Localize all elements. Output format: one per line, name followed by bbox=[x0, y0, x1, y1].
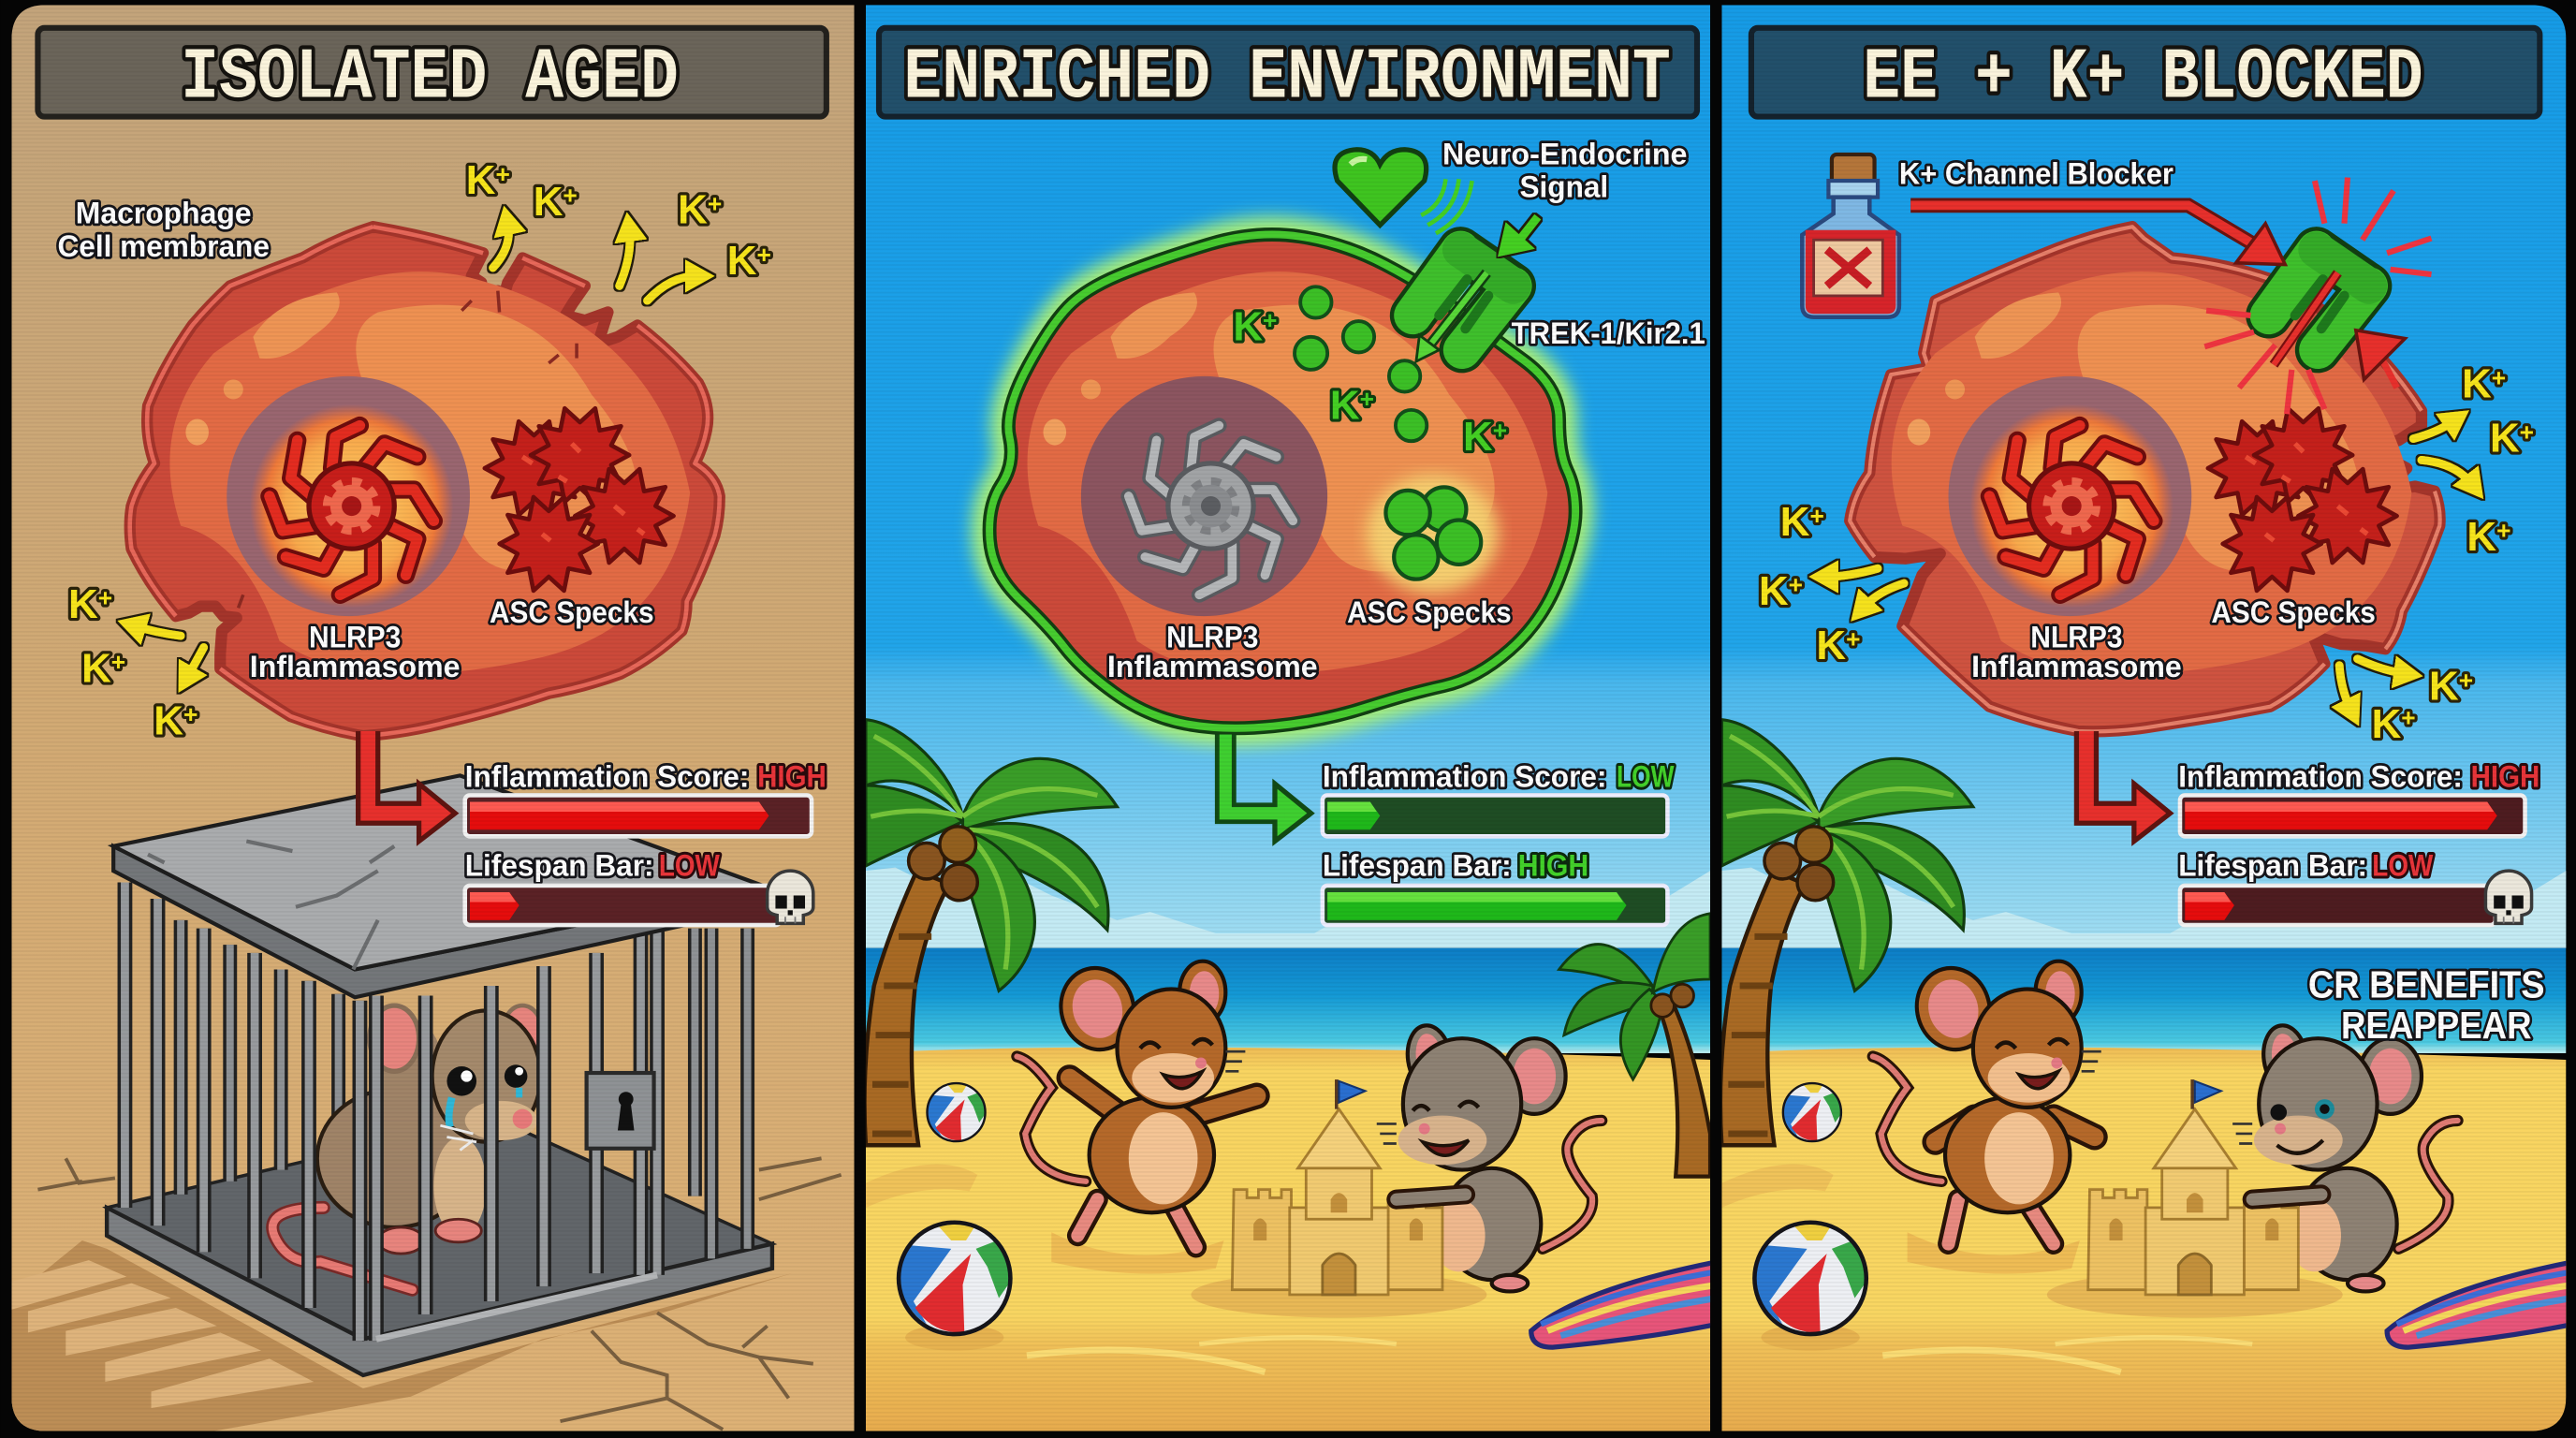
macrophage cell: healthy with green membrane bbox=[989, 234, 1575, 728]
macrophage cell: damaged again bbox=[1850, 227, 2440, 731]
inflammation score bar: high: Inflammation Score: bbox=[2178, 760, 2463, 794]
title bar: isolated aged: ISOLATED AGED bbox=[181, 38, 679, 120]
neuro-endocrine heart and signal bbox=[1335, 150, 1538, 252]
labels: enriched panel: Inflammasome bbox=[1107, 650, 1318, 683]
potassium entering through channel bbox=[1233, 286, 1507, 460]
label: macrophage cell membrane: Macrophage bbox=[76, 197, 252, 230]
potassium entering through channel: + bbox=[1263, 306, 1277, 334]
K+ ions leaving cell: + bbox=[708, 189, 722, 217]
macrophage cell: ruptured bbox=[130, 227, 720, 736]
labels: blocked panel bbox=[1971, 595, 2376, 683]
K+ ions leaving cell: + bbox=[2520, 418, 2534, 446]
labels: enriched panel: NLRP3 bbox=[1166, 620, 1258, 653]
lifespan bar: high: Lifespan Bar: bbox=[1323, 848, 1512, 882]
callout: CR benefits reappear: REAPPEAR bbox=[2341, 1004, 2532, 1047]
panel: enriched environment bbox=[865, 5, 1717, 1431]
K+ ions leaving cell: K bbox=[154, 697, 183, 743]
K+ ions leaving cell bbox=[68, 157, 771, 743]
potassium entering through channel: + bbox=[1493, 417, 1507, 445]
K+ ions leaving cell: K bbox=[2372, 701, 2401, 747]
potassium entering through channel: K bbox=[1330, 383, 1360, 429]
potassium entering through channel: K bbox=[1463, 414, 1493, 460]
sandcastle bbox=[2047, 1079, 2343, 1318]
potassium entering through channel: + bbox=[1360, 385, 1374, 413]
K+ ions leaving cell: K bbox=[534, 179, 563, 225]
title bar: EE + K+ blocked: EE + K+ BLOCKED bbox=[1863, 38, 2423, 120]
K+ ions leaving cell: K bbox=[1759, 568, 1789, 614]
TREK-1/Kir2.1 channel bbox=[1412, 250, 1513, 361]
lifespan bar: low, with skull: Lifespan Bar: bbox=[2178, 848, 2367, 882]
K+ ions leaving cell: + bbox=[757, 241, 771, 269]
K+ ions leaving cell: K bbox=[81, 645, 111, 691]
K+ ions leaving cell: K bbox=[727, 238, 757, 284]
lifespan bar: low, with skull bbox=[465, 848, 813, 925]
lifespan bar: low, with skull: LOW bbox=[2372, 848, 2434, 882]
nucleus with inactive grey inflammasome bbox=[1081, 376, 1327, 616]
inflammation score bar: low: LOW bbox=[1617, 760, 1675, 794]
label: K+ channel blocker: K+ Channel Blocker bbox=[1899, 157, 2174, 191]
labels: blocked panel: Inflammasome bbox=[1971, 650, 2182, 683]
K+ ions leaving cell: K bbox=[678, 187, 708, 233]
brown mouse standing bbox=[1873, 960, 2101, 1244]
K+ ions leaving cell: + bbox=[1809, 502, 1824, 530]
label: macrophage cell membrane: Cell membrane bbox=[57, 229, 270, 263]
title bar: enriched environment: ENRICHED ENVIRONMENT bbox=[903, 38, 1671, 120]
inflammation score bar: low bbox=[1323, 760, 1675, 836]
grey mouse arm and eyes bbox=[1397, 1102, 1479, 1199]
nucleus with active NLRP3 inflammasome bbox=[1949, 376, 2191, 616]
lifespan bar: high bbox=[1323, 848, 1667, 925]
sad rat bbox=[272, 1005, 542, 1290]
K+ ions leaving cell: + bbox=[183, 700, 198, 728]
padlock bbox=[587, 1073, 654, 1149]
ground: dirt and cracks bbox=[11, 1158, 842, 1431]
grey mouse arm and eyes bbox=[2252, 1099, 2334, 1199]
K+ ions leaving cell: + bbox=[98, 584, 112, 612]
K+ ions leaving cell bbox=[1759, 361, 2534, 747]
K+ ions leaving cell: K bbox=[1780, 499, 1809, 545]
K+ ions leaving cell: + bbox=[2459, 666, 2473, 694]
panel: isolated aged bbox=[11, 5, 855, 1431]
nucleus with active NLRP3 inflammasome bbox=[227, 376, 470, 616]
red arrow to channel from below bbox=[2356, 330, 2405, 388]
potassium entering through channel: K bbox=[1233, 303, 1263, 349]
grey mouse building bbox=[2232, 1022, 2458, 1291]
labels: NLRP3 and ASC: NLRP3 bbox=[309, 620, 401, 653]
beach background bbox=[865, 5, 1717, 1431]
inflammation score bar: high: HIGH bbox=[757, 760, 827, 794]
labels: enriched panel: TREK-1/Kir2.1 bbox=[1512, 316, 1705, 350]
K+ ions leaving cell: K bbox=[68, 581, 98, 627]
K+ ions leaving cell: K bbox=[466, 157, 495, 203]
labels: blocked panel: ASC Specks bbox=[2211, 595, 2376, 629]
K+ ions leaving cell: + bbox=[1789, 571, 1803, 599]
lifespan bar: low, with skull: LOW bbox=[659, 848, 720, 882]
labels: NLRP3 and ASC: ASC Specks bbox=[490, 595, 654, 629]
brown mouse jumping bbox=[1017, 960, 1257, 1247]
blocked channel with burst bbox=[2204, 178, 2431, 414]
labels: enriched panel bbox=[1107, 138, 1705, 683]
connector arrow: red bbox=[2086, 731, 2170, 842]
K+ ions leaving cell: K bbox=[2490, 416, 2520, 462]
labels: NLRP3 and ASC: Inflammasome bbox=[250, 650, 460, 683]
panel: EE + K+ blocked bbox=[1720, 5, 2572, 1431]
lifespan bar: low, with skull: Lifespan Bar: bbox=[465, 848, 654, 882]
callout: CR benefits reappear bbox=[2308, 962, 2545, 1047]
K+ ions leaving cell: + bbox=[111, 648, 125, 676]
potassium efflux arrows bbox=[1827, 420, 2472, 710]
connector arrow: red bbox=[368, 731, 455, 842]
inflammation score bar: high bbox=[2178, 760, 2539, 836]
ASC specks: red bbox=[2208, 408, 2397, 591]
labels: blocked panel: NLRP3 bbox=[2030, 620, 2123, 653]
grey mouse building bbox=[1377, 1022, 1602, 1291]
K+ ions leaving cell: + bbox=[495, 160, 510, 188]
ASC specks: red bbox=[485, 408, 674, 591]
labels: enriched panel: Signal bbox=[1519, 170, 1608, 204]
inflammation score bar: high: Inflammation Score: bbox=[465, 760, 749, 794]
K+ ions leaving cell: K bbox=[2466, 514, 2496, 560]
K+ ions leaving cell: + bbox=[563, 182, 578, 210]
labels: enriched panel: ASC Specks bbox=[1347, 595, 1512, 629]
inflammation score bar: high: HIGH bbox=[2471, 760, 2539, 794]
cage with sad rat bbox=[107, 775, 772, 1375]
title bar: isolated aged bbox=[37, 28, 827, 120]
ASC specks: green cluster bbox=[1367, 475, 1499, 594]
lifespan bar: high: HIGH bbox=[1518, 848, 1588, 882]
K+ ions leaving cell: + bbox=[2401, 704, 2416, 732]
inflammation score bar: high bbox=[465, 760, 827, 836]
labels: NLRP3 and ASC bbox=[250, 595, 654, 683]
label: macrophage cell membrane bbox=[57, 197, 270, 263]
small palm tree bbox=[1559, 914, 1710, 1177]
lifespan bar: low, with skull bbox=[2178, 848, 2532, 925]
K+ ions leaving cell: + bbox=[2496, 517, 2510, 545]
red inhibitor arrow bbox=[1910, 205, 2285, 265]
K+ ions leaving cell: + bbox=[1846, 624, 1860, 653]
K+ ions leaving cell: K bbox=[2429, 664, 2459, 710]
potion: K+ channel blocker bbox=[1802, 154, 1899, 317]
beach background bbox=[1720, 5, 2572, 1431]
callout: CR benefits reappear: CR BENEFITS bbox=[2308, 962, 2545, 1005]
K+ ions leaving cell: + bbox=[2492, 363, 2506, 391]
inflammation score bar: low: Inflammation Score: bbox=[1323, 760, 1606, 794]
connector arrow: green bbox=[1225, 734, 1311, 842]
K+ ions leaving cell: K bbox=[2462, 361, 2492, 407]
K+ ions leaving cell: K bbox=[1816, 623, 1846, 668]
labels: enriched panel: Neuro-Endocrine bbox=[1442, 138, 1687, 171]
sandcastle bbox=[1191, 1079, 1486, 1318]
potassium efflux arrows bbox=[135, 224, 696, 677]
